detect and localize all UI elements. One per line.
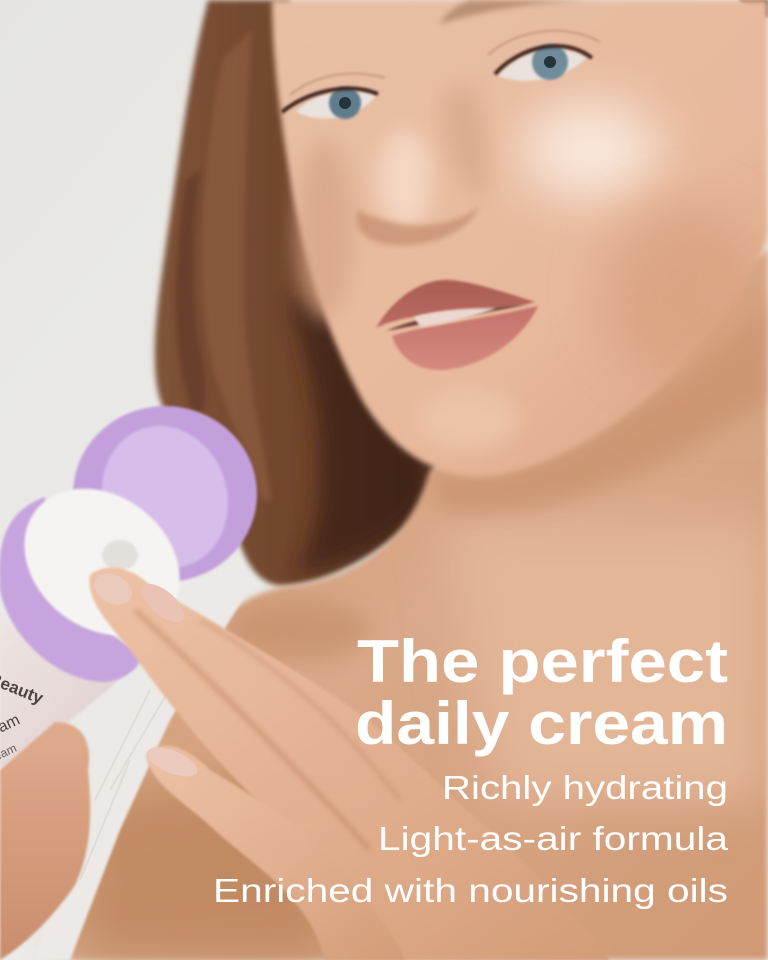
temple shading <box>297 140 353 320</box>
nail <box>143 742 201 782</box>
benefits list: Enriched with nourishing oils <box>213 872 728 909</box>
tube collar <box>0 497 142 682</box>
left eye <box>282 73 385 119</box>
lower finger <box>146 746 405 960</box>
hair at top right corner <box>738 0 768 18</box>
open lid <box>73 406 257 585</box>
chest and shoulder <box>70 250 768 960</box>
tube body <box>0 620 140 768</box>
eyebrow <box>440 0 600 24</box>
heading: The perfect <box>357 628 728 695</box>
neck shadow under chin <box>430 300 768 514</box>
finger crease shadow <box>135 610 370 850</box>
nose highlight <box>377 130 433 230</box>
benefits list <box>213 769 729 909</box>
nail <box>135 577 191 629</box>
nail <box>89 567 137 611</box>
cap nozzle <box>102 540 138 570</box>
nose shadow <box>357 205 480 245</box>
cheek highlight <box>520 100 660 200</box>
white tube cap <box>0 458 209 666</box>
index finger <box>89 567 610 960</box>
right eye <box>488 31 600 81</box>
benefits list: Light-as-air formula <box>378 820 729 857</box>
holding hand <box>0 722 90 960</box>
heading <box>355 628 728 757</box>
lips <box>376 280 538 370</box>
hands <box>0 567 610 960</box>
lower chest shadow <box>70 760 340 960</box>
hair <box>155 0 768 586</box>
neck <box>450 520 768 800</box>
white top strap <box>35 565 248 960</box>
nose side shadow <box>444 85 488 200</box>
chin highlight <box>420 390 520 450</box>
heading: daily cream <box>355 690 728 757</box>
collarbone shading <box>230 600 370 660</box>
product: cream tube <box>0 406 257 768</box>
benefits list: Richly hydrating <box>442 769 728 806</box>
face <box>272 0 768 476</box>
jaw shading <box>600 200 760 380</box>
